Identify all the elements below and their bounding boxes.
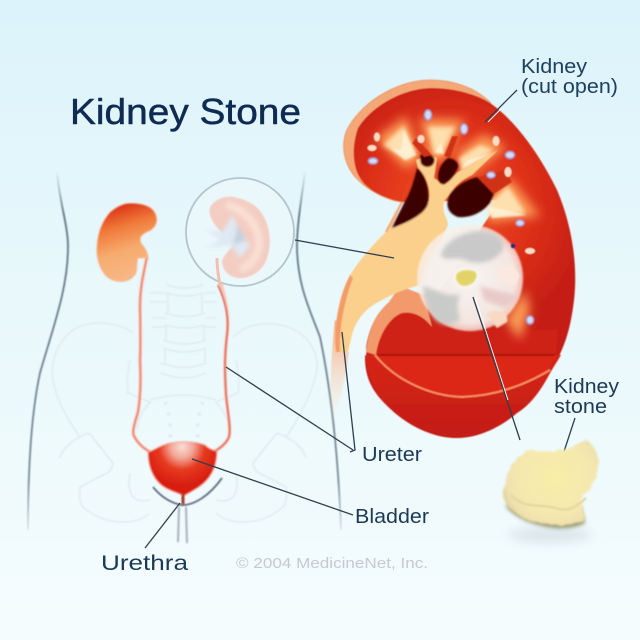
main red body — [354, 88, 575, 438]
outer capsule (peach upper rim) — [344, 80, 500, 202]
skeleton: spine and pelvis — [52, 285, 317, 522]
pelvis peach edge — [335, 275, 353, 352]
small kidney — [97, 203, 157, 282]
medullary pyramids — [383, 126, 526, 216]
sacrum holes — [165, 402, 203, 440]
label: kidney cut open: (cut open) — [521, 76, 618, 98]
bladder — [148, 442, 222, 543]
white notch between ureter and lower lobe — [348, 301, 389, 355]
vessel ovals — [368, 110, 534, 324]
white leader highlights — [475, 108, 508, 400]
magnifier circle with pale kidney — [186, 178, 294, 286]
pyramid highlights — [390, 130, 526, 218]
label: kidney stone: Kidney — [554, 376, 619, 398]
label: kidney cut open — [521, 56, 618, 98]
peach hilum seam — [386, 202, 402, 232]
orange glow of medulla — [376, 116, 540, 340]
large kidney cut open — [331, 80, 575, 438]
small stone — [455, 269, 477, 287]
ureters — [133, 255, 230, 452]
lower rim stroke — [375, 355, 550, 397]
magnified stone lens — [417, 225, 523, 331]
ureter tail — [331, 320, 351, 425]
lower chamber back — [377, 313, 558, 355]
label: ureter: Ureter — [362, 444, 422, 466]
label: kidney stone: stone — [554, 396, 607, 418]
lower peach wall — [366, 286, 432, 355]
kidney stone photo — [503, 440, 598, 543]
label: kidney cut open: Kidney — [521, 56, 587, 78]
chamber ledge — [378, 354, 555, 356]
leader lines — [145, 90, 575, 548]
dark calyces — [392, 154, 494, 228]
copyright: © 2004 MedicineNet, Inc. — [236, 555, 428, 572]
red tubules — [412, 136, 512, 194]
lower wall — [366, 355, 561, 438]
label: bladder: Bladder — [355, 506, 429, 528]
label: kidney stone — [554, 376, 619, 418]
pale vessel spots — [368, 132, 535, 254]
lower chamber floor — [376, 355, 556, 397]
title: Kidney Stone — [70, 91, 301, 132]
label: urethra: Urethra — [101, 552, 188, 575]
renal pelvis and calyces — [335, 150, 498, 352]
body outline — [28, 172, 341, 530]
